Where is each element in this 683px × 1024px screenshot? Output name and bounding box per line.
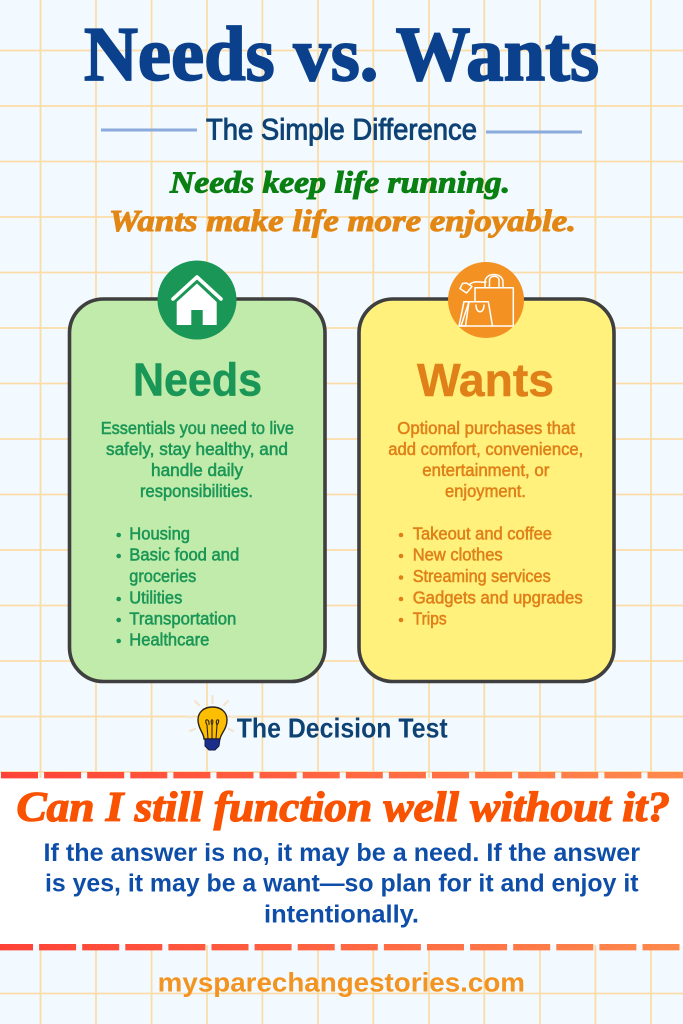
needs list: Healthcare bbox=[129, 630, 209, 650]
wants description: enjoyment. bbox=[445, 481, 526, 501]
needs description bbox=[101, 418, 294, 501]
needs description: handle daily bbox=[151, 460, 243, 480]
needs description: Essentials you need to live bbox=[101, 418, 294, 438]
panel: wants bbox=[359, 262, 614, 682]
needs list: Housing bbox=[129, 524, 190, 544]
subtitle: The Simple Difference: The Simple Difference bbox=[206, 114, 477, 146]
tagline: wants: Wants make life more enjoyable. bbox=[109, 203, 576, 238]
answer text: If the answer is no, it may be a need. If the answer bbox=[44, 839, 640, 867]
needs heading: Needs bbox=[133, 354, 262, 406]
wants list: Streaming services bbox=[413, 566, 551, 586]
callout: decision question bbox=[0, 775, 683, 947]
icon: shopping bags bbox=[448, 262, 524, 338]
wants description: Optional purchases that bbox=[397, 418, 575, 438]
footer url: mysparechangestories.com bbox=[158, 968, 525, 998]
answer text bbox=[44, 839, 640, 929]
panel: needs bbox=[70, 260, 325, 682]
wants description: entertainment, or bbox=[422, 460, 549, 480]
icon: house bbox=[158, 260, 236, 340]
needs list bbox=[116, 524, 239, 650]
wants description: add comfort, convenience, bbox=[388, 439, 583, 459]
needs list: Basic food and bbox=[129, 545, 239, 565]
answer text: is yes, it may be a want—so plan for it and enjoy it bbox=[45, 870, 639, 898]
needs list: groceries bbox=[129, 566, 197, 586]
needs list: Transportation bbox=[129, 609, 236, 629]
wants list: New clothes bbox=[413, 545, 503, 565]
wants list: Gadgets and upgrades bbox=[413, 588, 583, 608]
needs description: responsibilities. bbox=[140, 481, 253, 501]
wants list: Takeout and coffee bbox=[413, 524, 552, 544]
decision test heading: The Decision Test bbox=[237, 712, 448, 743]
icon: light bulb bbox=[187, 696, 236, 750]
answer text: intentionally. bbox=[264, 901, 419, 929]
wants heading: Wants bbox=[417, 354, 554, 406]
question: Can I still function well without it? bbox=[16, 785, 670, 831]
wants list bbox=[399, 524, 583, 629]
needs list: Utilities bbox=[129, 588, 183, 608]
subtitle: The Simple Difference bbox=[101, 114, 582, 146]
title: Needs vs. Wants bbox=[84, 11, 599, 97]
decision test heading bbox=[187, 696, 448, 750]
wants list: Trips bbox=[413, 609, 447, 629]
needs description: safely, stay healthy, and bbox=[106, 439, 288, 459]
tagline: needs: Needs keep life running. bbox=[169, 164, 510, 200]
wants description bbox=[388, 418, 583, 501]
